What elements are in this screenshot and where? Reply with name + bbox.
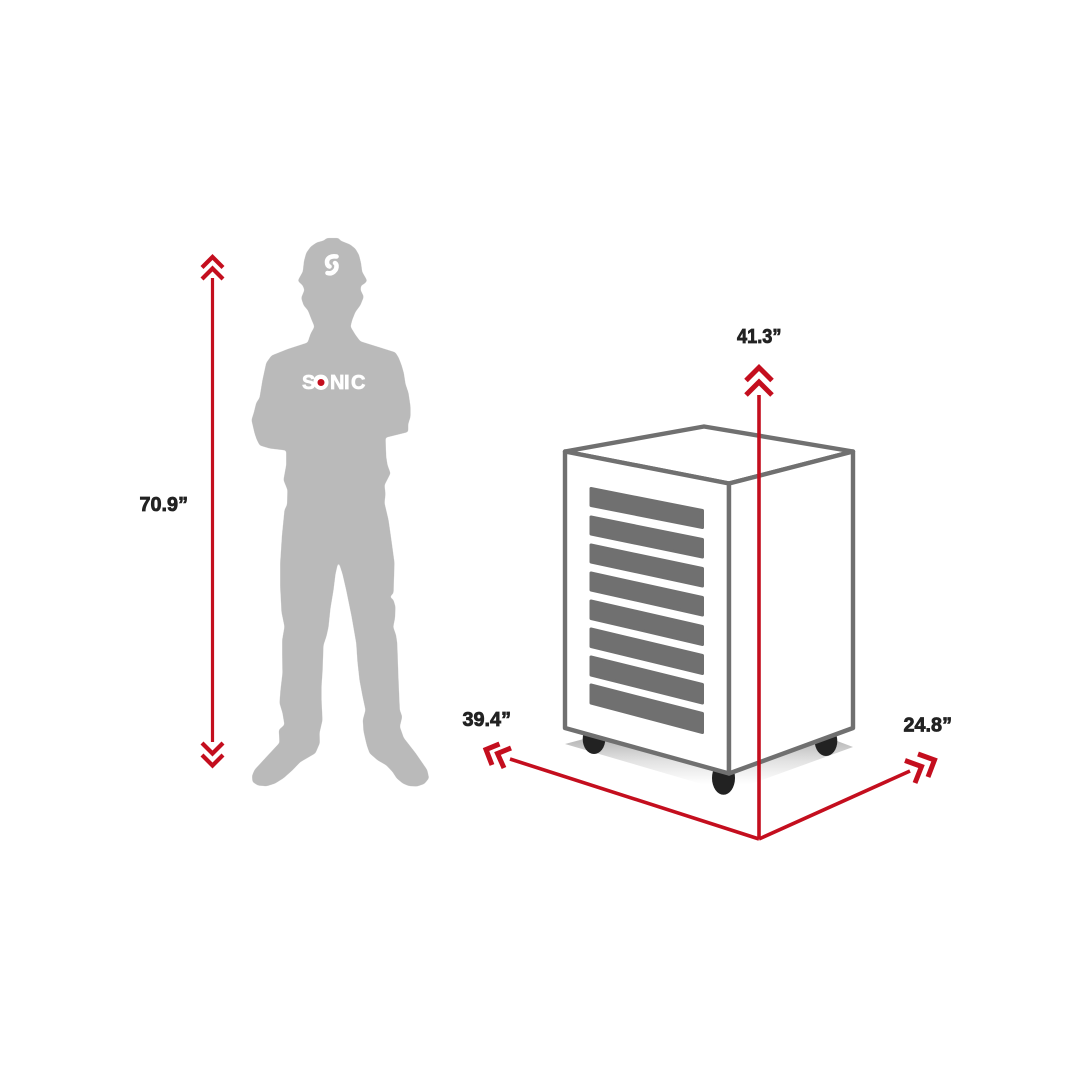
cabinet bbox=[565, 426, 853, 795]
drawers bbox=[591, 488, 702, 732]
depth arrow: right bbox=[759, 754, 934, 839]
floor shadow bbox=[565, 700, 853, 792]
label: cabinet height: 41.3” bbox=[737, 325, 782, 348]
label: cabinet width: 39.4” bbox=[462, 708, 511, 731]
height arrow: cabinet bbox=[746, 368, 772, 839]
label: cabinet depth: 24.8” bbox=[904, 714, 952, 736]
height arrow: person bbox=[202, 257, 223, 766]
person silhouette bbox=[252, 238, 428, 786]
shirt logo: SONIC bbox=[302, 372, 365, 394]
cabinet body bbox=[565, 426, 853, 774]
dimension arrows: cabinet bbox=[486, 368, 934, 839]
label: person height: 70.9” bbox=[140, 493, 188, 516]
wheels bbox=[583, 724, 837, 795]
width arrow: left bbox=[486, 744, 759, 839]
cap logo icon bbox=[327, 256, 337, 273]
